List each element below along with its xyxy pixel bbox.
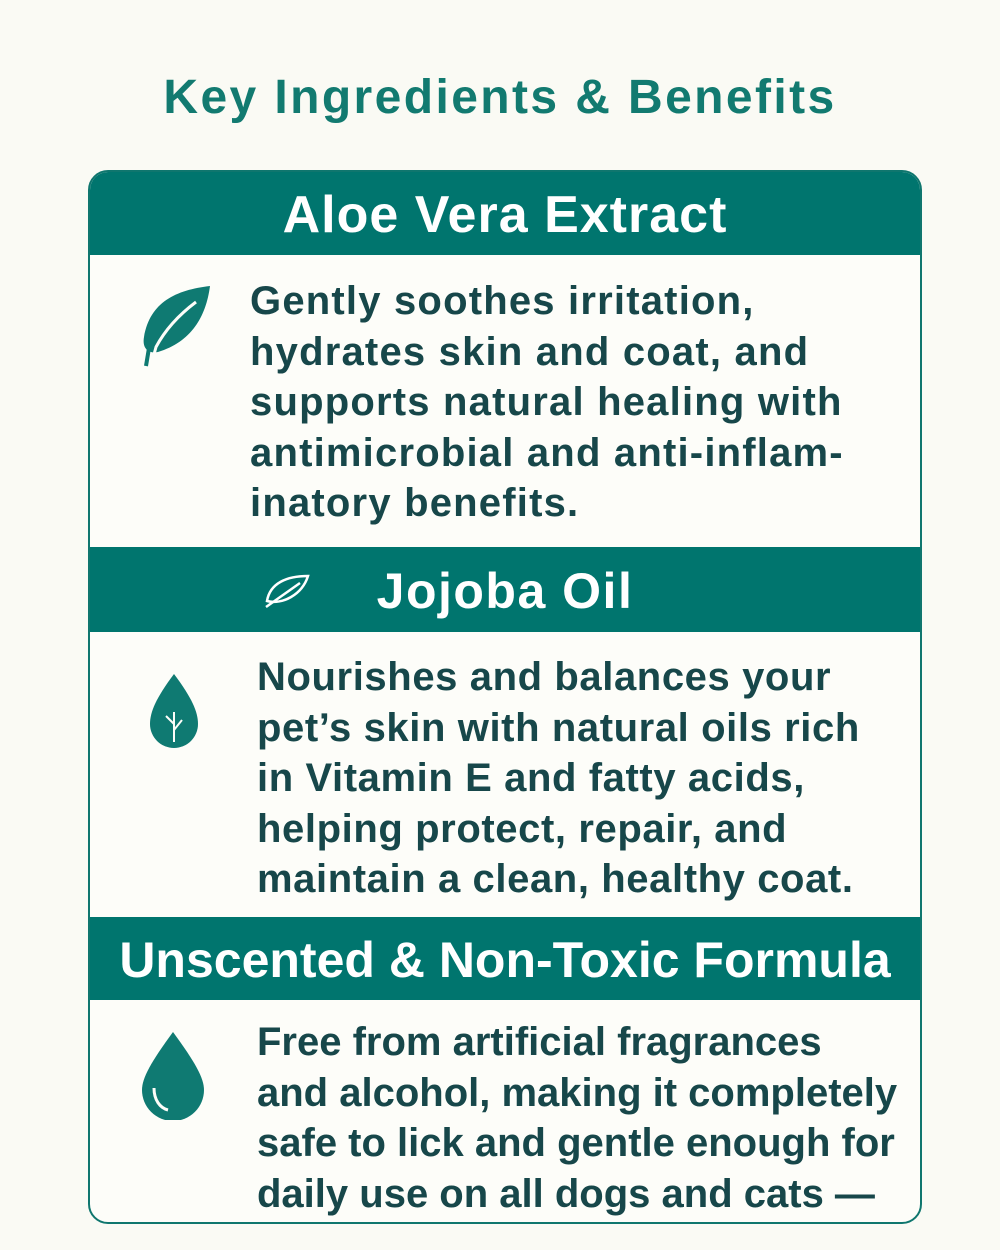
text: aloe vera benefits: antimicrobial and anti-inflam- (250, 430, 844, 474)
text: unscented benefits (257, 1020, 897, 1216)
icon: outline leaf (265, 574, 310, 608)
text: jojoba benefits: maintain a clean, healthy coat. (257, 857, 854, 901)
text: unscented benefits: and alcohol, making it completely (257, 1070, 897, 1114)
text: jojoba benefits: in Vitamin E and fatty acids, (257, 756, 805, 800)
text: jojoba benefits (257, 655, 860, 901)
icon: oil drop with sprig (150, 674, 198, 748)
text: unscented benefits: daily use on all dogs and cats — (257, 1172, 875, 1216)
header: jojoba oil (90, 547, 920, 632)
text: aloe vera benefits (250, 279, 844, 525)
panel: ingredients card (88, 170, 922, 1224)
text: aloe vera benefits: supports natural healing with (250, 380, 843, 424)
text: jojoba benefits: pet’s skin with natural oils rich (257, 706, 860, 750)
header: unscented formula: Unscented & Non-Toxic Formula (119, 932, 891, 988)
icon: water drop (142, 1032, 204, 1120)
text: unscented benefits: Free from artificial fragrances (257, 1020, 822, 1064)
text: aloe vera benefits: inatory benefits. (250, 481, 579, 525)
icon: leaf (144, 286, 210, 366)
header: aloe vera: Aloe Vera Extract (283, 186, 727, 244)
header: aloe vera (90, 172, 920, 255)
header: unscented formula (90, 917, 920, 1000)
text: jojoba benefits: Nourishes and balances your (257, 655, 831, 699)
text: aloe vera benefits: hydrates skin and coat, and (250, 330, 809, 374)
text: unscented benefits: safe to lick and gentle enough for (257, 1121, 895, 1165)
text: aloe vera benefits: Gently soothes irritation, (250, 279, 755, 323)
header: jojoba oil: Jojoba Oil (377, 563, 633, 619)
title: Key Ingredients & Benefits (163, 71, 837, 124)
text: jojoba benefits: helping protect, repair, and (257, 806, 787, 850)
